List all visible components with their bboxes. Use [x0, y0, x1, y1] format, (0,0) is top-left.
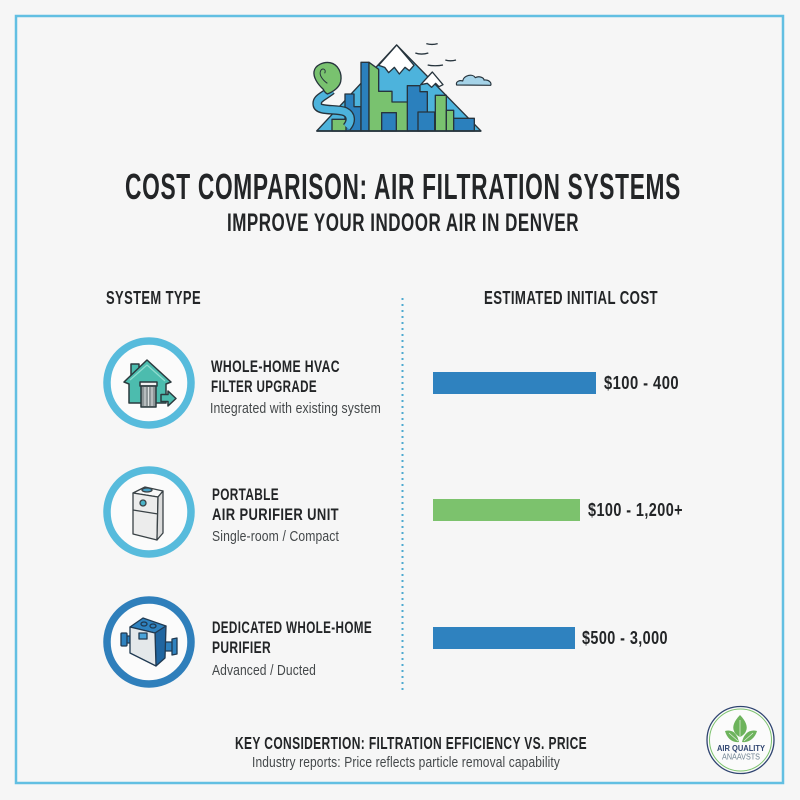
row: whole-home HVAC filter upgrade: FILTER UPGRADE	[211, 378, 317, 396]
badge: air quality analysts: ANAAVSTS	[722, 752, 760, 762]
row: whole-home HVAC filter upgrade	[107, 341, 679, 425]
column heading: estimated initial cost: ESTIMATED INITIAL COST	[484, 288, 658, 308]
icon: house with filter	[107, 341, 191, 425]
bar: purifier cost	[433, 499, 580, 521]
label: HVAC name: WHOLE-HOME HVAC	[211, 358, 340, 376]
label: dedicated detail: Advanced / Ducted	[212, 663, 316, 679]
label: purifier detail: Single-room / Compact	[212, 529, 339, 545]
row: portable air purifier unit	[107, 470, 683, 554]
icon: mountain city logo	[314, 44, 491, 131]
icon: air purifier	[107, 470, 191, 554]
value: dedicated cost: $500 - 3,000	[582, 628, 668, 648]
icon: ducted purifier	[107, 600, 191, 684]
bar: HVAC cost	[433, 372, 596, 394]
row: portable air purifier unit: AIR PURIFIER UNIT	[212, 506, 339, 524]
row: dedicated whole-home purifier: PURIFIER	[212, 639, 271, 657]
icon: leaves	[725, 715, 757, 742]
row: dedicated whole-home purifier	[107, 600, 668, 684]
badge: air quality analysts	[707, 706, 774, 774]
subtitle: IMPROVE YOUR INDOOR AIR IN DENVER	[227, 209, 579, 237]
value: HVAC cost: $100 - 400	[604, 373, 679, 393]
label: dedicated name: DEDICATED WHOLE-HOME	[212, 619, 372, 637]
label: purifier name: PORTABLE	[212, 486, 279, 504]
column heading: system type: SYSTEM TYPE	[106, 288, 201, 308]
badge: air quality analysts: AIR QUALITY	[717, 744, 766, 753]
value: purifier cost: $100 - 1,200+	[588, 500, 683, 520]
bar: dedicated cost	[433, 627, 575, 649]
key consideration heading: KEY CONSIDERTION: FILTRATION EFFICIENCY VS. PRICE	[235, 733, 587, 753]
key consideration note: Industry reports: Price reflects particle removal capability	[252, 755, 560, 771]
label: HVAC detail: Integrated with existing system	[210, 401, 381, 417]
center divider	[402, 298, 404, 690]
